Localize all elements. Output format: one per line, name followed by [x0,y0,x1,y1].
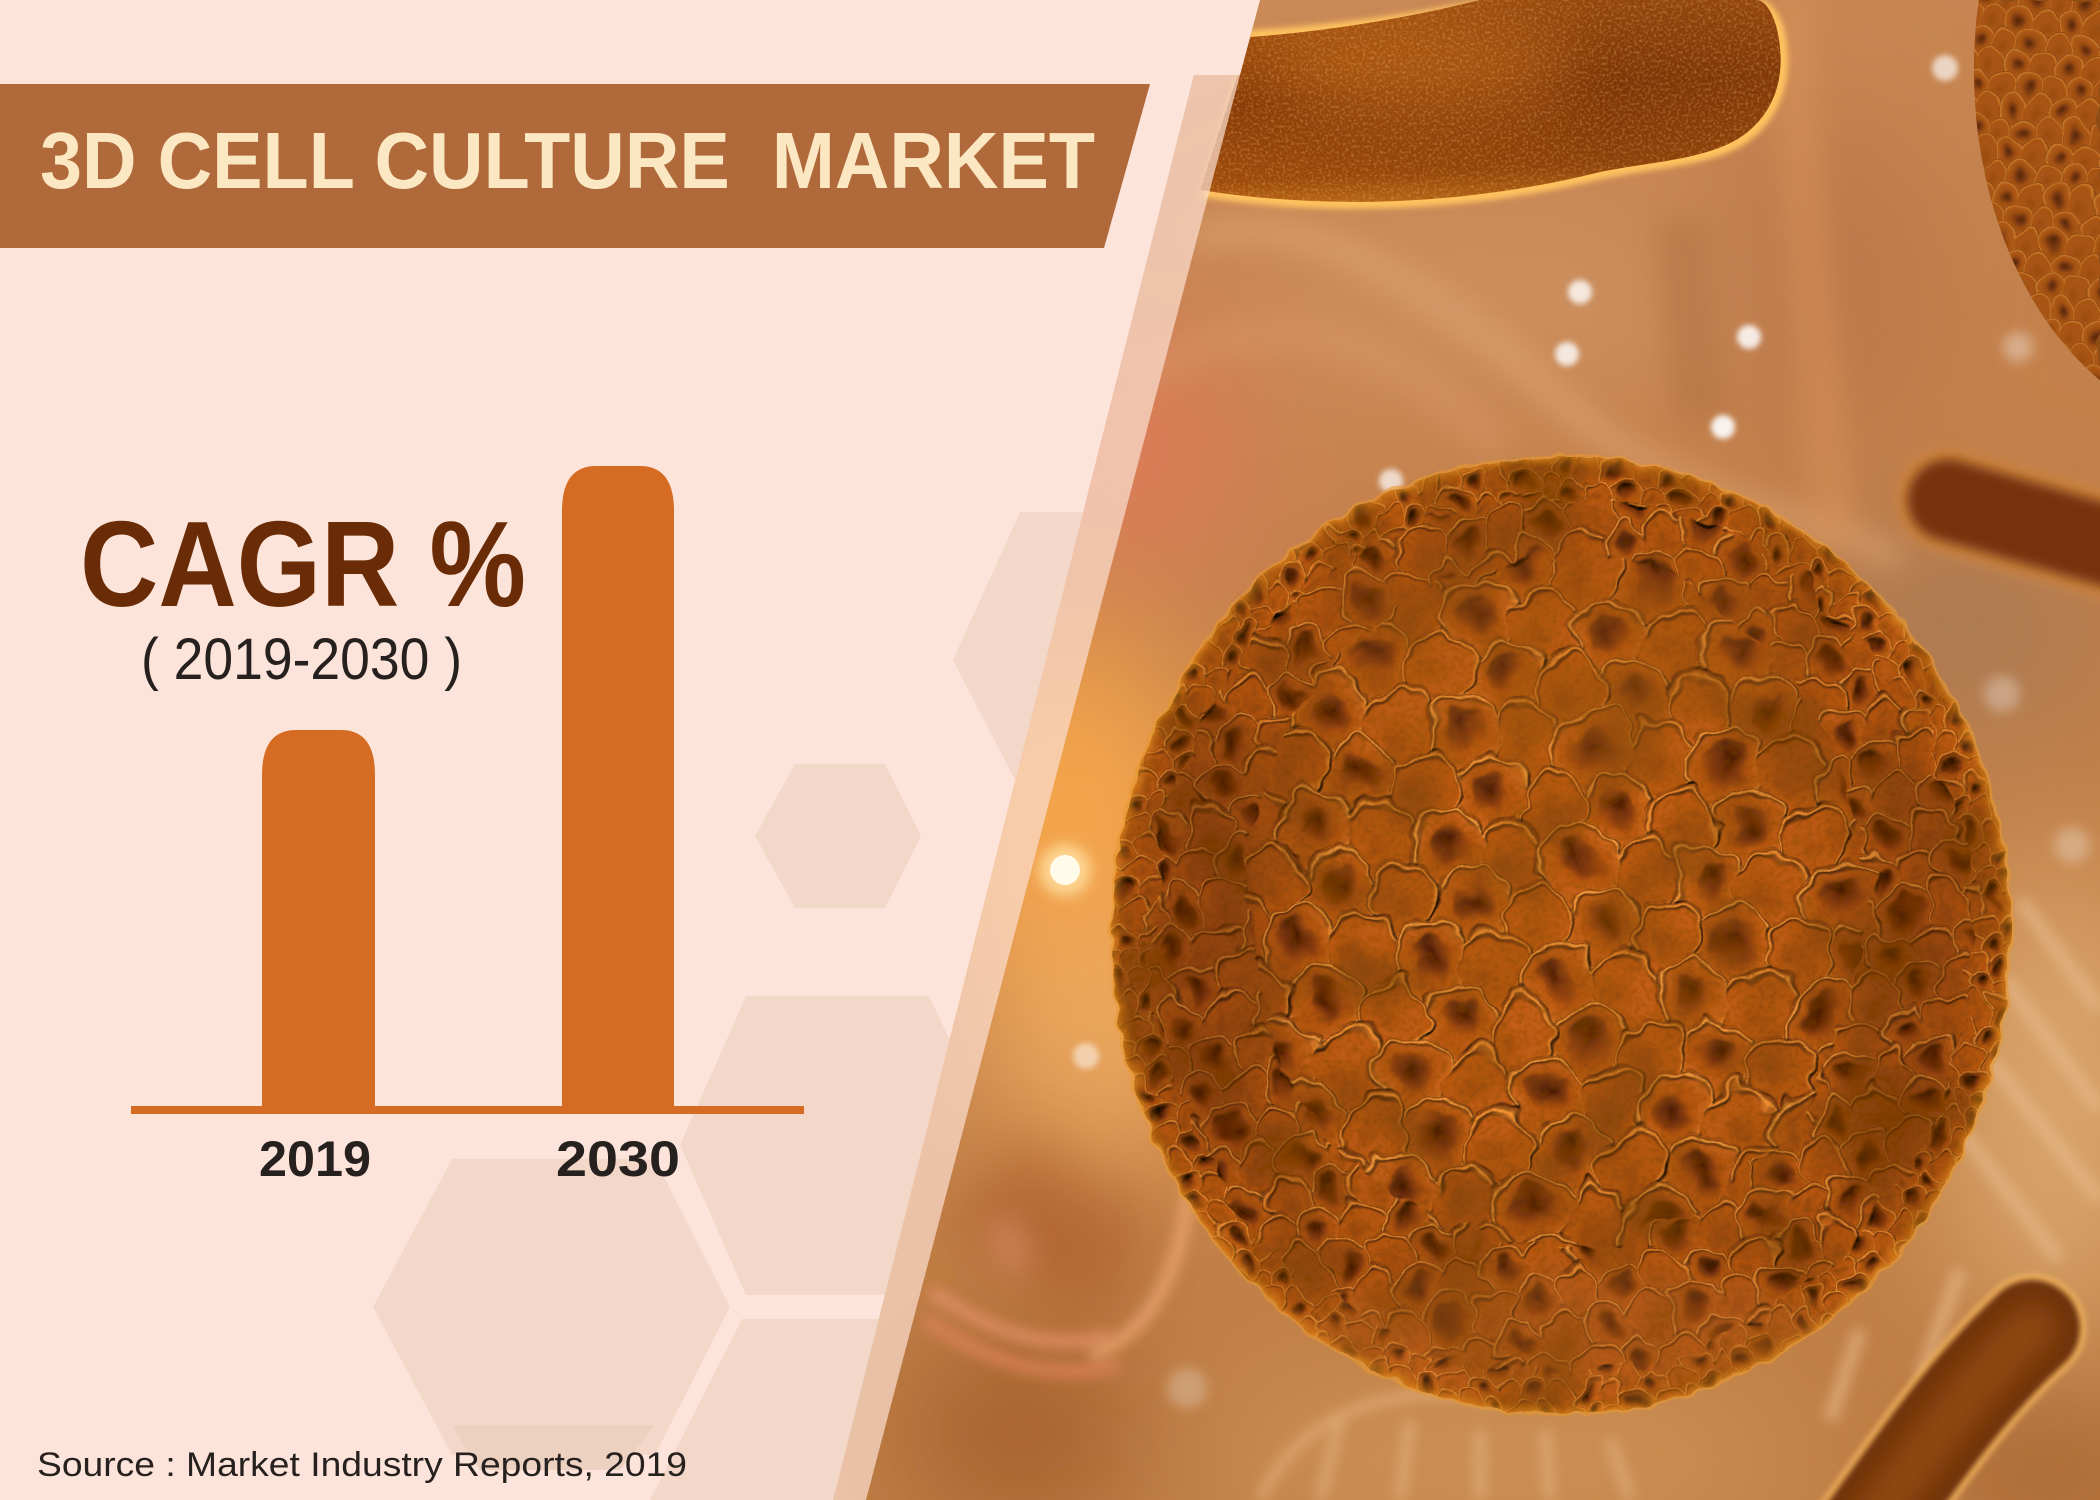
blurred DNA strands [925,0,2100,1500]
top rod-shaped bacterium [1190,0,1800,220]
title banner [0,84,1150,248]
background photo: orange microscopic scene [780,0,2100,1500]
left light panel [0,0,1260,1500]
source note: Source : Market Industry Reports, 2019 [37,1446,687,1484]
title text: 3D CELL CULTURE MARKET [40,116,1095,205]
bottom-right bacterium [1860,1328,2032,1500]
label: 2030: 2030 [556,1131,680,1187]
translucent diagonal strip [833,75,1240,1500]
bar: 2030 [562,466,674,1110]
bar: 2019 [262,730,375,1110]
top-right cell sphere [1974,0,2100,380]
CAGR period: ( 2019-2030 ) [141,627,462,692]
CAGR heading: CAGR % [80,496,526,632]
decorative hexagons [373,512,1150,1500]
large 3D cell spheroid [1091,435,2031,1435]
broad tonal variation [1140,530,1980,1390]
bar chart [131,466,804,1187]
right small bacterium [1948,500,2100,552]
label: 2019: 2019 [259,1131,371,1187]
axis [131,1106,804,1114]
glowing particles [1039,55,2090,1408]
